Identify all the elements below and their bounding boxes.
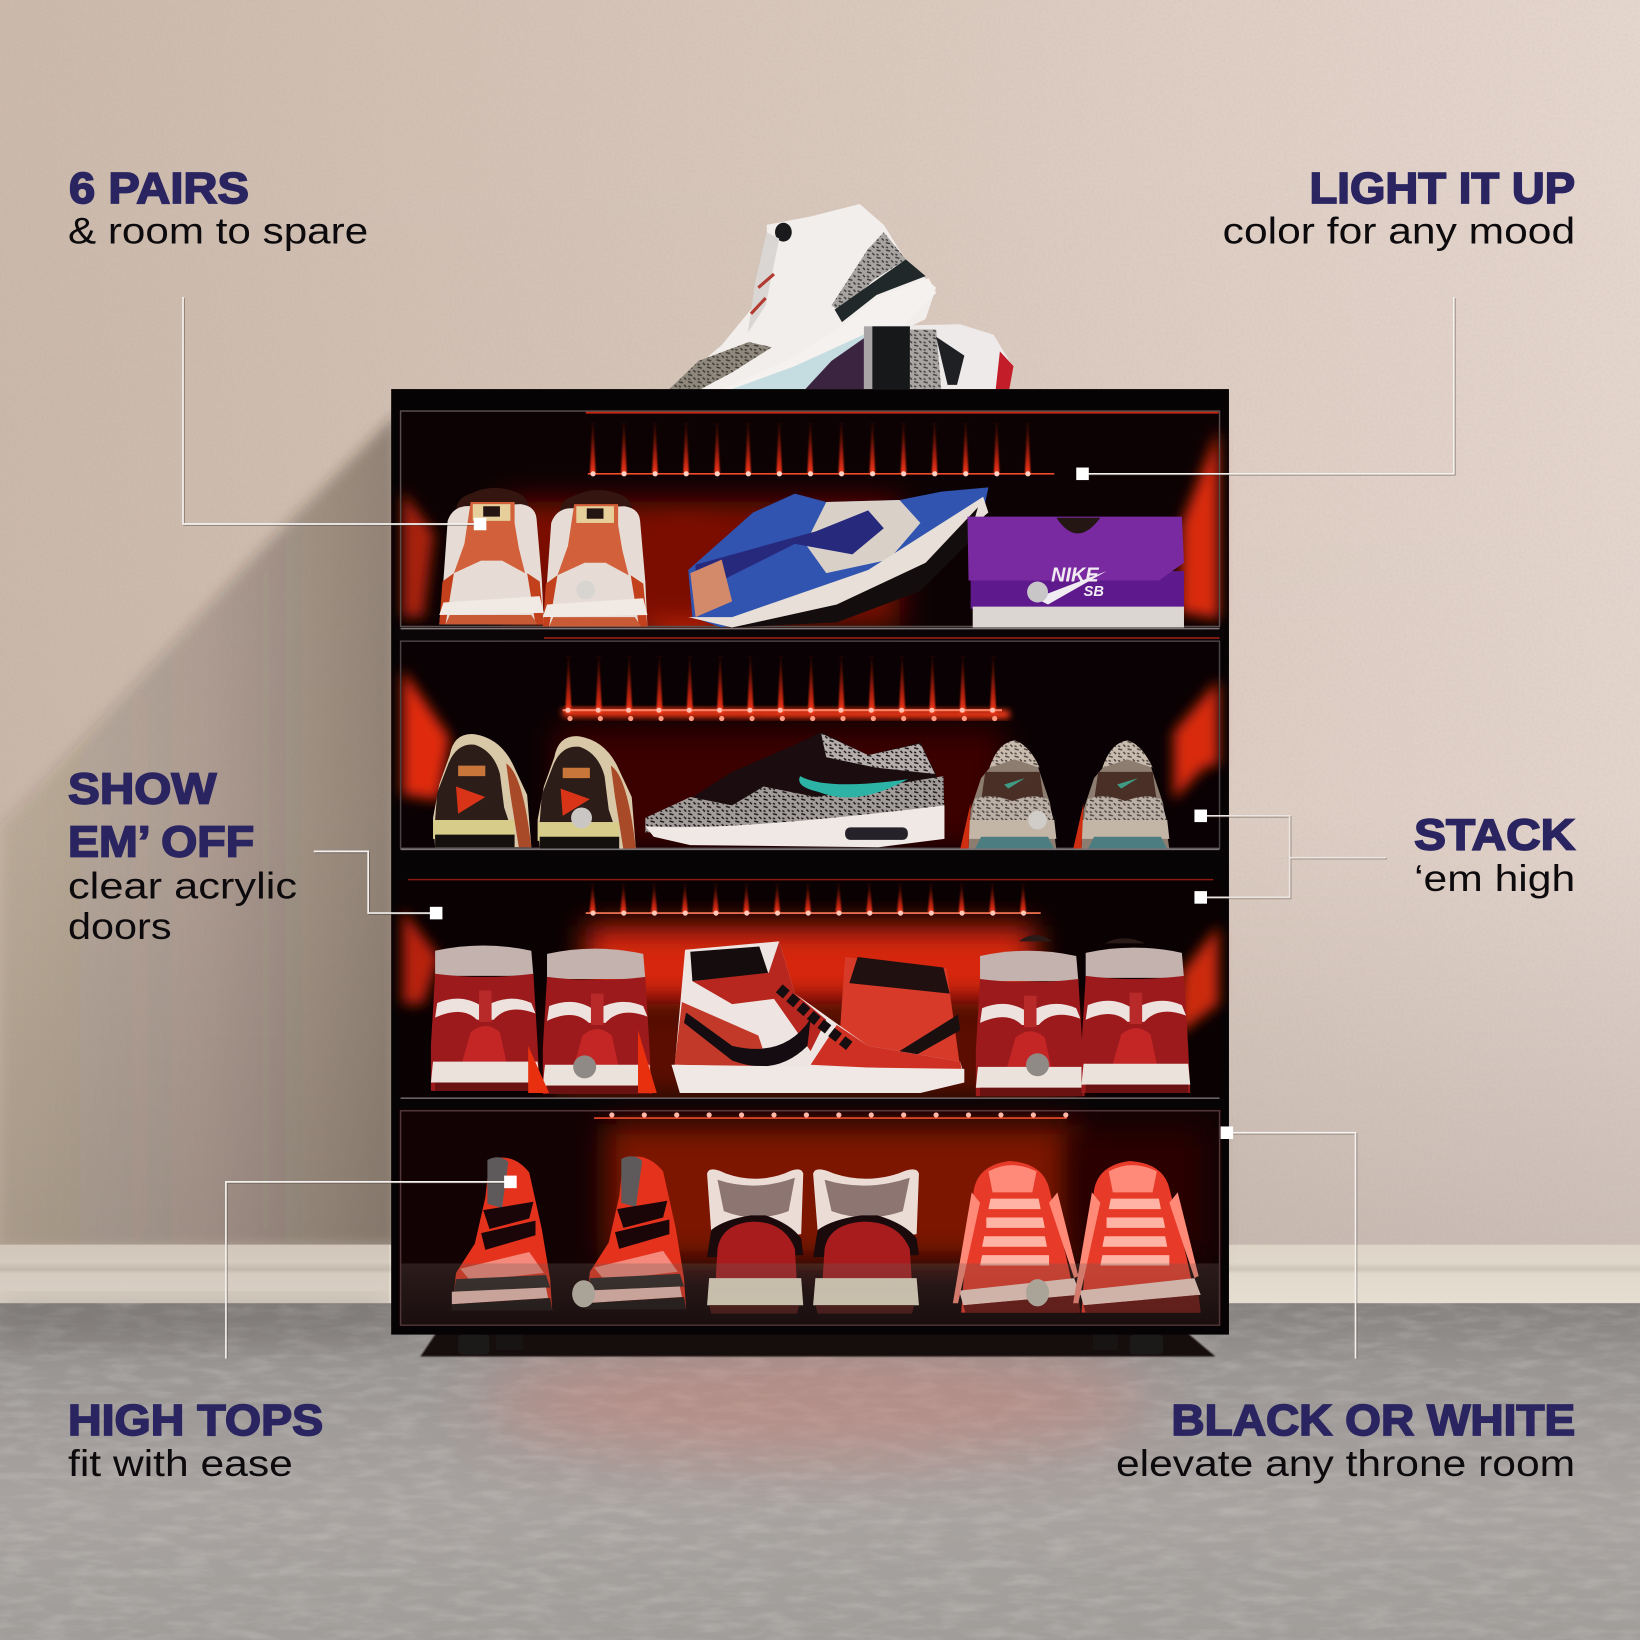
wall background xyxy=(0,0,1640,1250)
LED strip xyxy=(594,1111,1067,1118)
heading: SHOW xyxy=(68,764,217,813)
icon: blue dunk sneaker xyxy=(688,487,988,628)
LED strip xyxy=(588,424,1054,474)
panel: bottom compartment xyxy=(398,1109,1222,1326)
LED strip xyxy=(553,657,1009,719)
callout: black or white xyxy=(1116,1126,1575,1484)
heading: HIGH TOPS xyxy=(68,1396,323,1445)
callout: show em off xyxy=(68,764,442,947)
leader line xyxy=(314,851,442,919)
heading: 6 PAIRS xyxy=(69,164,249,213)
leader line xyxy=(1221,1126,1357,1359)
shelf divider 1 xyxy=(395,628,1225,640)
leader line xyxy=(1076,297,1455,480)
icon: orange rear sneakers xyxy=(439,488,647,627)
subheading: ‘em high xyxy=(1414,858,1575,899)
icon: purple shoe box xyxy=(967,517,1184,628)
subheading: color for any mood xyxy=(1223,211,1575,252)
glass top edge glow xyxy=(586,411,1218,414)
leader line xyxy=(226,1176,517,1359)
heading: LIGHT IT UP xyxy=(1309,164,1575,213)
callout: light it up xyxy=(1076,164,1575,480)
icon: chicago rear sneakers left xyxy=(431,946,657,1094)
subheading: & room to spare xyxy=(68,211,368,252)
cabinet feet xyxy=(458,1335,1163,1354)
icon: bright red laced sneakers xyxy=(953,1161,1201,1313)
icon: black and red toe sneakers xyxy=(452,1156,686,1311)
subheading: fit with ease xyxy=(68,1443,293,1484)
subheading: elevate any throne room xyxy=(1116,1443,1575,1484)
baseboard xyxy=(0,1245,1640,1303)
panel: top compartment xyxy=(398,410,1222,643)
icon: tilted white cement sneaker xyxy=(669,204,936,389)
subheading line two: doors xyxy=(68,906,172,947)
callout: stack xyxy=(1194,810,1575,904)
icon: purple shoe box: NIKE xyxy=(1051,565,1099,587)
callout: 6 pairs xyxy=(68,164,486,530)
concrete floor xyxy=(0,1303,1640,1640)
floor shadow below cabinet xyxy=(420,1328,1215,1357)
LED strip xyxy=(577,885,1044,913)
icon: white cement sneaker lying behind xyxy=(864,324,1013,389)
shelf divider 3 xyxy=(395,1098,1225,1109)
icon: air max side view xyxy=(645,732,944,847)
subheading: clear acrylic xyxy=(68,865,297,906)
icon: chicago side view sneakers xyxy=(671,941,964,1093)
leader line xyxy=(1194,810,1387,904)
leader line xyxy=(183,297,486,530)
icon: atmos rear sneakers xyxy=(433,734,636,849)
sneakers on top of the cabinet xyxy=(669,204,1013,389)
callout: high tops xyxy=(68,1176,517,1484)
icon: chicago rear sneakers right xyxy=(976,935,1190,1096)
cabinet wall shadow xyxy=(0,413,397,1247)
heading line two: EM’ OFF xyxy=(68,818,254,867)
panel: second compartment xyxy=(398,640,1222,849)
icon: chicago heel sneakers xyxy=(707,1169,919,1314)
glass reflection band xyxy=(401,1263,1220,1324)
shelf divider 2 xyxy=(395,849,1225,881)
heading: BLACK OR WHITE xyxy=(1171,1396,1575,1445)
shelf cabinet xyxy=(391,389,1229,1354)
panel: third compartment xyxy=(398,881,1222,1098)
heading: STACK xyxy=(1414,810,1575,859)
icon: purple shoe box: SB xyxy=(1084,584,1104,600)
icon: safari rear sneakers xyxy=(960,741,1169,849)
